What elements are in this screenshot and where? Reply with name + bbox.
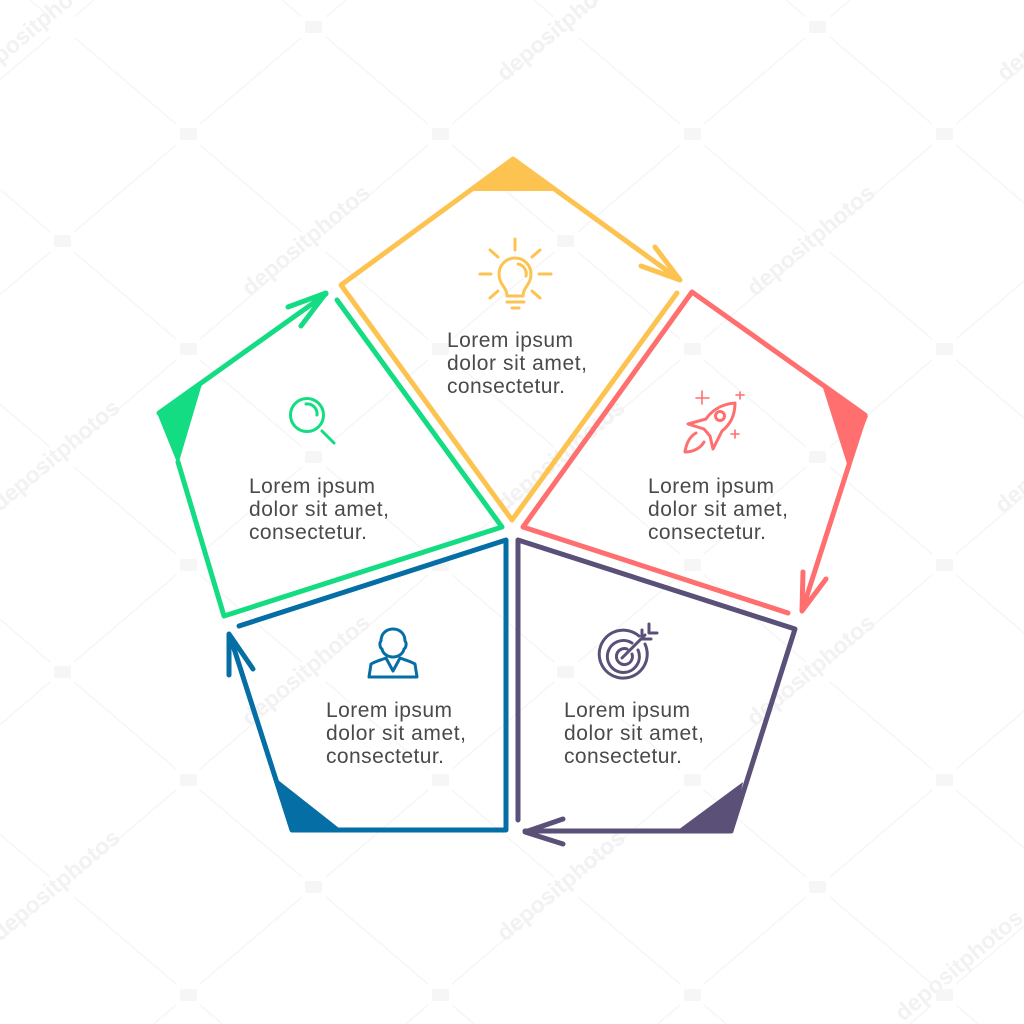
- text: yellow caption: [447, 329, 587, 398]
- text: green caption: [249, 475, 389, 544]
- text: blue caption: dolor sit amet,: [326, 722, 466, 745]
- panel: green segment: [157, 293, 502, 616]
- watermark text: depositphotos: [492, 824, 630, 946]
- yellow corner triangle: [472, 157, 557, 191]
- watermark text: depositphotos: [742, 609, 880, 731]
- panel: yellow segment: [341, 157, 680, 520]
- icon: magnifier: [290, 398, 334, 443]
- blue outline arrow: [229, 540, 506, 830]
- icon: light bulb: [480, 239, 551, 308]
- panel: purple segment: [518, 540, 795, 844]
- text: blue caption: Lorem ipsum: [326, 699, 452, 722]
- text: yellow caption: dolor sit amet,: [447, 352, 587, 375]
- text: purple caption: dolor sit amet,: [564, 722, 704, 745]
- blue corner triangle: [278, 780, 344, 832]
- panel: red segment: [523, 292, 868, 613]
- text: red caption: [648, 475, 788, 544]
- text: red caption: Lorem ipsum: [648, 475, 774, 498]
- text: green caption: Lorem ipsum: [249, 475, 375, 498]
- text: red caption: dolor sit amet,: [648, 498, 788, 521]
- red outline arrow: [523, 292, 865, 613]
- text: red caption: consectetur.: [648, 521, 766, 544]
- watermark text: depositphotos: [237, 609, 375, 731]
- text: blue caption: consectetur.: [326, 745, 444, 768]
- text: green caption: consectetur.: [249, 521, 367, 544]
- watermark text: depositphotos: [742, 179, 880, 301]
- text: yellow caption: consectetur.: [447, 375, 565, 398]
- icon: target: [599, 624, 657, 678]
- text: purple caption: Lorem ipsum: [564, 699, 690, 722]
- purple corner triangle: [678, 782, 743, 833]
- watermark text: depositphotos: [492, 394, 630, 516]
- green outline arrow: [159, 293, 502, 616]
- icon: person: [369, 629, 417, 677]
- text: yellow caption: Lorem ipsum: [447, 329, 573, 352]
- yellow outline arrow: [341, 159, 680, 520]
- icon: rocket: [685, 391, 744, 452]
- text: blue caption: [326, 699, 466, 768]
- text: green caption: dolor sit amet,: [249, 498, 389, 521]
- green corner triangle: [157, 384, 202, 465]
- watermark text: depositphotos: [237, 179, 375, 301]
- text: purple caption: consectetur.: [564, 745, 682, 768]
- text: purple caption: [564, 699, 704, 768]
- purple outline arrow: [518, 540, 795, 844]
- panel: blue segment: [229, 540, 506, 832]
- red corner triangle: [823, 388, 868, 467]
